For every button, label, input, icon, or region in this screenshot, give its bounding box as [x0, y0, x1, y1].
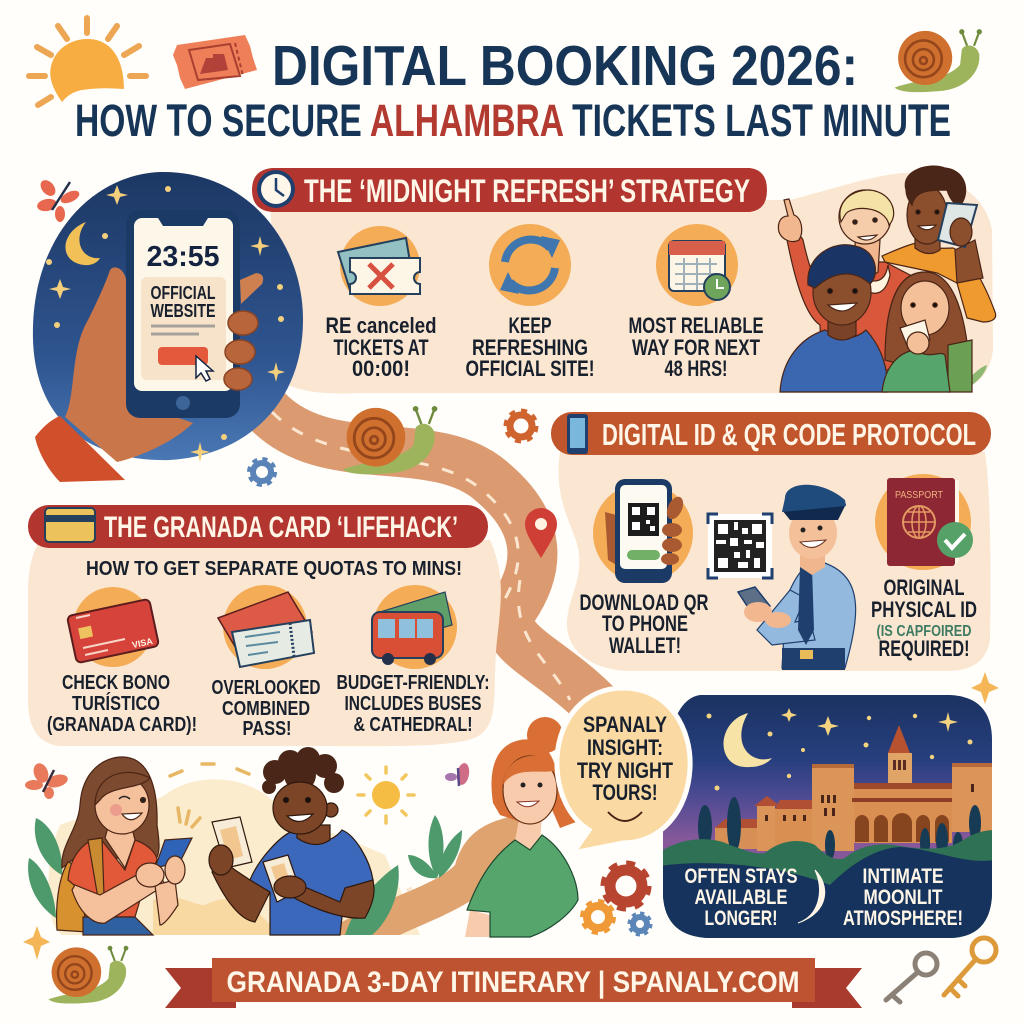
- footer banner: GRANADA 3-DAY ITINERARY | SPANALY.COM: [226, 966, 800, 999]
- text: canceled tickets: RE canceled: [326, 313, 436, 338]
- text: most reliable: 48 HRS!: [664, 356, 728, 381]
- text: often stays: LONGER!: [704, 907, 778, 930]
- text: intimate moonlit: [843, 868, 962, 925]
- scene background: [48, 779, 420, 935]
- text: keep refreshing: KEEP: [508, 313, 552, 338]
- text: most reliable: WAY FOR NEXT: [632, 335, 760, 360]
- text: intimate moonlit: INTIMATE: [862, 865, 944, 888]
- text: most reliable: [628, 313, 764, 381]
- icon: purple butterfly: [445, 762, 471, 786]
- icon: butterfly: [36, 177, 81, 222]
- illustration: guide woman: [465, 717, 578, 937]
- panel: night tours: [660, 690, 995, 940]
- text: original physical ID: [871, 575, 977, 661]
- text: budget friendly: & CATHEDRAL!: [354, 714, 472, 736]
- icon: phone: [126, 210, 240, 418]
- icon: snail bottom left: [48, 946, 128, 1004]
- text: budget friendly: INCLUDES BUSES: [344, 693, 482, 715]
- icon: passport: [875, 474, 973, 570]
- panel background: [558, 452, 990, 671]
- panel: Granada card: [28, 505, 501, 746]
- panel background: [28, 540, 501, 746]
- icon: phone QR: [593, 479, 693, 583]
- hand and sleeve: [65, 267, 193, 462]
- icon: canceled tickets: [338, 226, 420, 306]
- text: intimate moonlit: MOONLIT: [864, 886, 943, 909]
- text: canceled tickets: 00:00!: [352, 356, 410, 381]
- icon: calendar: [656, 224, 738, 306]
- icon: credit card: [67, 587, 159, 667]
- icon: tickets: [218, 585, 314, 669]
- text: overlooked: PASS!: [242, 718, 292, 740]
- sun rays arc: [170, 764, 249, 827]
- icon: crescent moon: [723, 713, 772, 767]
- illustration: palace: [715, 725, 992, 851]
- text: intimate moonlit: ATMOSPHERE!: [843, 907, 963, 930]
- heading banner: THE GRANADA CARD ‘LIFEHACK’: [104, 511, 458, 544]
- fingers: [224, 273, 263, 390]
- icon: QR code: [708, 514, 772, 578]
- icon: gears: [582, 863, 651, 935]
- text: original physical ID: (IS CAPFOIRED: [876, 623, 972, 640]
- text: download QR: WALLET!: [609, 633, 681, 658]
- text: download QR: TO PHONE: [602, 611, 688, 636]
- panel: midnight refresh: [252, 166, 996, 393]
- icon: bus and cash: [372, 585, 457, 669]
- icon: phone: WEBSITE: [150, 301, 216, 321]
- speech bubble: TOURS!: [592, 780, 658, 805]
- text: keep refreshing: REFRESHING: [472, 335, 588, 360]
- heading banner: [252, 168, 767, 212]
- icon: sparkle left: [23, 926, 50, 960]
- icon: keys: [886, 938, 996, 1002]
- trees: [698, 797, 981, 860]
- footer banner: [165, 958, 862, 1008]
- night sky: [660, 690, 995, 940]
- text: check bono: (GRANADA CARD)!: [47, 714, 197, 736]
- icon: phone: 23:55: [146, 241, 220, 273]
- text: canceled tickets: [326, 313, 436, 381]
- subheading: HOW TO GET SEPARATE QUOTAS TO MINS!: [86, 558, 462, 580]
- text: overlooked: OVERLOOKED: [212, 677, 320, 699]
- heading banner: [28, 505, 488, 548]
- person: woman: [57, 757, 192, 935]
- text: overlooked: [212, 677, 320, 740]
- text: check bono: CHECK BONO: [62, 672, 170, 694]
- icon: snail top right: [895, 29, 982, 92]
- icon: refresh: [489, 224, 571, 306]
- hills: [660, 830, 995, 940]
- icon: blue gear: [249, 459, 275, 485]
- icon: butterfly: [25, 761, 69, 799]
- road path: [262, 405, 610, 720]
- icon: passport: PASSPORT: [895, 489, 943, 501]
- heading banner: [551, 412, 991, 455]
- illustration: group of friends: [778, 166, 996, 392]
- text: check bono: [47, 672, 197, 736]
- leaves right: [345, 815, 462, 935]
- heading banner: THE ‘MIDNIGHT REFRESH’ STRATEGY: [304, 173, 750, 209]
- panel: digital ID: [551, 412, 991, 671]
- speech bubble: SPANALY: [583, 712, 667, 737]
- text: original physical ID: ORIGINAL: [884, 575, 964, 600]
- stars: [46, 185, 285, 462]
- stars: [706, 708, 972, 790]
- person: man: [209, 747, 374, 935]
- leaves left: [28, 818, 62, 918]
- icon: orange gear: [506, 410, 536, 442]
- speech bubble: TRY NIGHT: [577, 758, 673, 783]
- panel background: [270, 173, 993, 393]
- text: overlooked: COMBINED: [222, 698, 310, 720]
- title: DIGITAL BOOKING 2026:: [272, 34, 858, 98]
- text: download QR: [580, 590, 709, 658]
- text: original physical ID: REQUIRED!: [878, 636, 970, 661]
- illustration: officer: [738, 485, 856, 670]
- title: [75, 34, 951, 146]
- text: keep refreshing: OFFICIAL SITE!: [466, 356, 594, 381]
- text: check bono: TURÍSTICO: [72, 692, 160, 715]
- icon: moon: [65, 222, 100, 265]
- icon: sun: [29, 18, 146, 105]
- icon: phone: OFFICIAL: [150, 283, 216, 303]
- text: budget friendly: BUDGET-FRIENDLY:: [336, 672, 490, 694]
- icon: credit card: VISA: [131, 636, 154, 650]
- speech bubble: INSIGHT:: [587, 735, 663, 760]
- icon: sparkle right: [971, 672, 999, 704]
- text: often stays: AVAILABLE: [694, 886, 788, 909]
- text: canceled tickets: TICKETS AT: [334, 335, 429, 360]
- text: original physical ID: PHYSICAL ID: [871, 597, 977, 622]
- text: keep refreshing: [466, 313, 594, 381]
- foreground hills: [660, 847, 995, 940]
- icon: small sun: [358, 767, 414, 823]
- text: often stays: OFTEN STAYS: [684, 865, 798, 888]
- icon: ticket: [173, 35, 257, 89]
- text: most reliable: MOST RELIABLE: [628, 313, 764, 338]
- speech bubble: [557, 688, 690, 853]
- icon: snail on road: [343, 406, 437, 474]
- text: download QR: DOWNLOAD QR: [580, 590, 709, 615]
- scene: friends with tickets: [25, 747, 525, 935]
- text: often stays: [685, 868, 797, 925]
- night blob: [33, 172, 303, 460]
- icon: caption crescent: [798, 870, 825, 923]
- icon: map pin: [525, 508, 557, 558]
- panel: night phone circle: [33, 172, 303, 482]
- text: budget friendly: [336, 672, 490, 736]
